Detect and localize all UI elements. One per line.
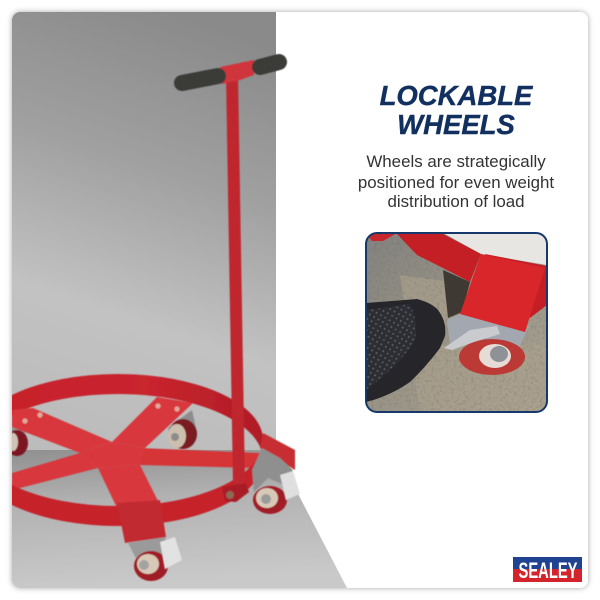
rear left wheel (12, 427, 29, 457)
inset photo: locking wheel (366, 233, 547, 412)
spokes (12, 397, 260, 508)
ring: back band (12, 373, 264, 450)
brake lever (444, 326, 500, 350)
tan patch (400, 275, 466, 402)
pole foot bracket (222, 483, 249, 502)
ring: front band (12, 462, 255, 527)
front mount plate (117, 500, 166, 543)
rear right wheel (168, 410, 197, 449)
photo: drum dolly (0, 12, 347, 588)
inset frame (366, 233, 547, 412)
backdrop: wall (12, 12, 276, 452)
shadow under plate (443, 270, 470, 318)
white drum (443, 233, 547, 265)
bolts (22, 403, 180, 424)
title: WHEELS (397, 109, 515, 140)
front caster (128, 537, 182, 581)
right mount plate (260, 433, 295, 470)
dolly (0, 60, 300, 581)
backdrop: floor (12, 450, 347, 588)
description text (358, 152, 554, 211)
concrete grain (366, 233, 547, 412)
right caster (252, 448, 300, 514)
description text: Wheels are strategically (366, 152, 546, 171)
description text: distribution of load (387, 192, 525, 211)
concrete ground (366, 233, 547, 412)
description text: positioned for even weight (358, 173, 554, 192)
handle (182, 60, 279, 84)
red band (397, 234, 481, 282)
caster bracket (447, 314, 532, 347)
title (380, 80, 534, 140)
title: LOCKABLE (380, 80, 534, 111)
red plate (460, 254, 545, 332)
shoe (366, 299, 445, 402)
wheel (459, 339, 525, 375)
pole (226, 75, 245, 485)
